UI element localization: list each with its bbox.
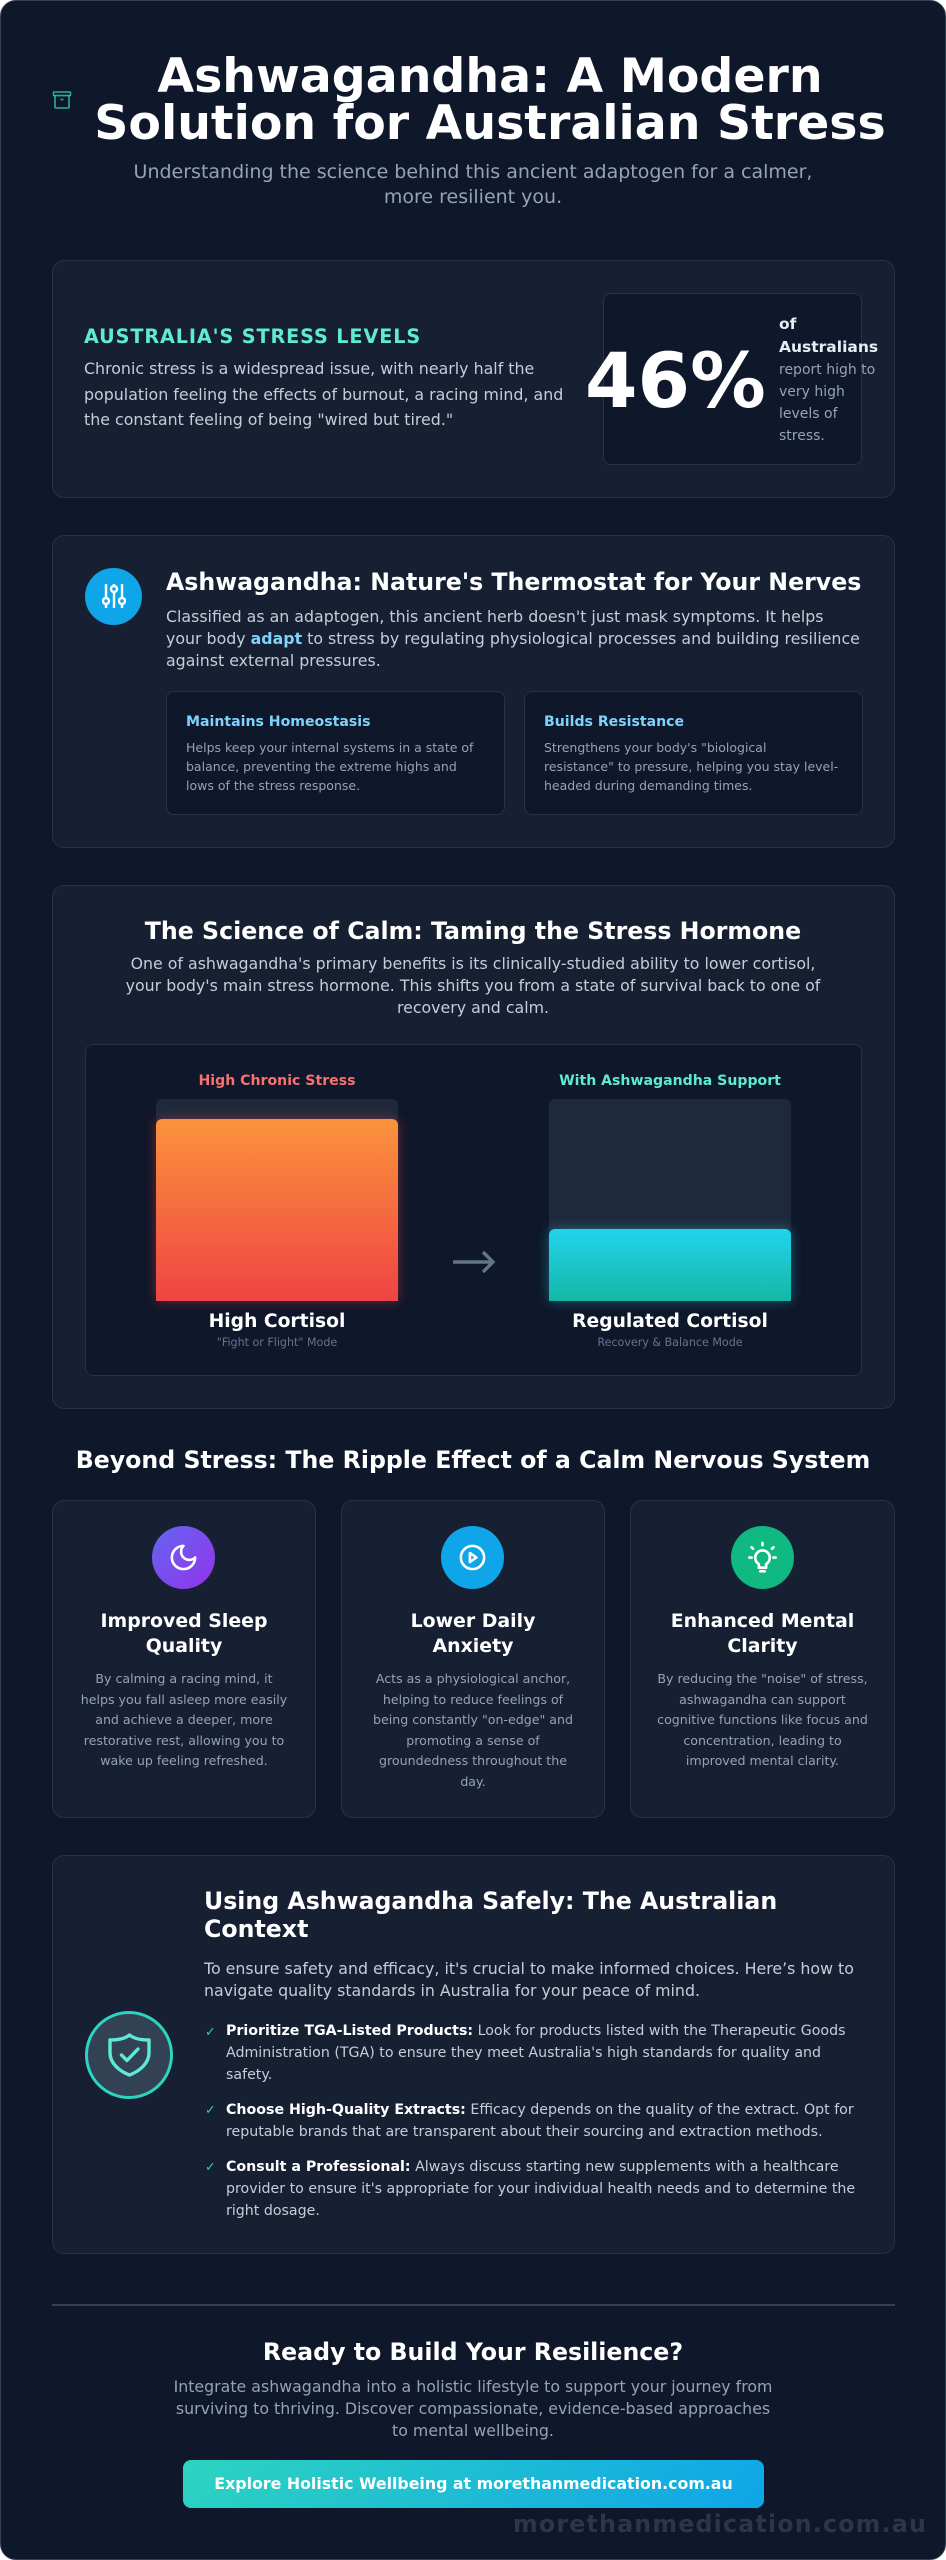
text: adaptogen: your body adapt to stress by regulating physiological processes and building resilience	[166, 629, 860, 648]
item: TGA: safety.	[226, 2067, 272, 2083]
heading: thermostat: Ashwagandha: Nature's Thermostat for Your Nerves	[166, 568, 861, 596]
text: safety intro	[204, 1959, 854, 2000]
card title: Maintains Homeostasis	[186, 714, 370, 730]
card text: Acts as a physiological anchor,	[376, 1671, 570, 1686]
heading: call to action: Ready to Build Your Resilience?	[263, 2338, 683, 2366]
text: chronic stress: population feeling the effects of burnout, a racing mind, and	[84, 385, 563, 404]
text: cortisol intro	[126, 954, 821, 1017]
card text: groundedness throughout the	[379, 1753, 567, 1768]
text: adaptogen: Classified as an adaptogen, this ancient herb doesn't just mask symptoms. It helps	[166, 607, 824, 626]
card text	[373, 1671, 573, 1788]
panel: science of calm	[52, 885, 895, 1409]
card text	[657, 1671, 868, 1768]
stat: 46%: 46%	[585, 337, 766, 425]
text: adaptogen	[166, 607, 860, 670]
subtitle: Understanding the science behind this ancient adaptogen for a calmer,	[134, 161, 812, 183]
stat caption: stress.	[779, 428, 825, 444]
heading: using safely	[204, 1887, 777, 1943]
card title: Builds Resistance	[544, 714, 684, 730]
heading: stress levels: AUSTRALIA'S STRESS LEVELS	[84, 325, 421, 348]
item: extracts	[226, 2102, 854, 2140]
card text: being constantly "on-edge" and	[373, 1712, 573, 1727]
card title: Clarity	[727, 1634, 798, 1656]
arrow	[453, 1250, 496, 1274]
text: call to action: surviving to thriving. Discover compassionate, evidence-based approaches	[176, 2399, 770, 2418]
label: regulated cortisol: Regulated Cortisol	[572, 1311, 768, 1332]
icon: moon	[152, 1526, 215, 1589]
card text: promoting a sense of	[406, 1732, 540, 1748]
item: extracts: Choose High-Quality Extracts: Efficacy depends on the quality of the extract. Opt for	[226, 2102, 854, 2118]
text: safety intro: To ensure safety and efficacy, it's crucial to make informed choices. Here’s how to	[204, 1959, 854, 1978]
watermark: morethanmedication.com.au	[513, 2510, 927, 2538]
heading: using safely: Context	[204, 1915, 308, 1943]
heading: science of calm: The Science of Calm: Taming the Stress Hormone	[145, 917, 801, 945]
bar: high cortisol	[156, 1098, 398, 1300]
icon: archive box	[52, 91, 72, 109]
stat caption	[779, 315, 878, 444]
title	[94, 49, 886, 151]
card title	[411, 1610, 536, 1656]
stat caption: of	[779, 315, 796, 333]
card: sleep	[52, 1500, 316, 1818]
text: chronic stress: Chronic stress is a widespread issue, with nearly half the	[84, 359, 534, 378]
subtitle: more resilient you.	[384, 186, 562, 208]
text: adaptogen: against external pressures.	[166, 651, 381, 670]
card text: improved mental clarity.	[686, 1753, 839, 1768]
stat caption: Australians	[779, 338, 878, 356]
card text	[544, 740, 838, 793]
card text: By reducing the "noise" of stress,	[657, 1671, 868, 1686]
label: recovery: Recovery & Balance Mode	[597, 1336, 743, 1349]
card: anxiety	[341, 1500, 605, 1818]
card text: day.	[460, 1774, 486, 1788]
item: extracts: reputable brands that are transparent about their sourcing and extraction methods.	[226, 2124, 823, 2140]
card text: wake up feeling refreshed.	[100, 1753, 268, 1768]
card title	[100, 1610, 267, 1656]
icon: light bulb	[731, 1526, 794, 1589]
card text: helping to reduce feelings of	[383, 1692, 563, 1706]
text: call to action: to mental wellbeing.	[392, 2421, 554, 2440]
item: TGA: Prioritize TGA-Listed Products: Look for products listed with the Therapeutic Goods	[226, 2023, 846, 2039]
card text: lows of the stress response.	[186, 778, 360, 793]
panel: using safely	[52, 1855, 895, 2254]
card text: restorative rest, allowing you to	[84, 1732, 284, 1748]
check: ✓	[205, 2160, 216, 2175]
item: TGA	[226, 2023, 846, 2083]
panel: Australia's stress levels	[52, 260, 895, 498]
stat box	[603, 293, 862, 465]
text: cortisol intro: recovery and calm.	[397, 998, 549, 1017]
card text: ashwagandha can support	[679, 1692, 846, 1706]
button: explore	[183, 2460, 764, 2508]
label: with support: With Ashwagandha Support	[559, 1073, 781, 1089]
panel: nature's thermostat	[52, 535, 895, 848]
card: resistance	[524, 691, 863, 815]
card title: Enhanced Mental	[671, 1610, 854, 1632]
item: professional: provider to ensure it's appropriate for your individual health needs and to determine the	[226, 2181, 855, 2197]
card text: concentration, leading to	[683, 1732, 842, 1748]
heading: using safely: Using Ashwagandha Safely: The Australian	[204, 1887, 777, 1915]
title: Ashwagandha: A Modern	[157, 49, 823, 104]
text: chronic stress	[84, 359, 563, 429]
item: professional: Consult a Professional: Always discuss starting new supplements with a healthcare	[226, 2159, 839, 2175]
stat caption: levels of	[779, 406, 838, 422]
check: ✓	[205, 2025, 216, 2040]
chart: cortisol comparison	[85, 1044, 862, 1376]
item: TGA: Administration (TGA) to ensure they meet Australia's high standards for quality and	[226, 2045, 821, 2061]
text: cortisol intro: your body's main stress hormone. This shifts you from a state of survival back to one of	[126, 976, 820, 995]
stat caption: very high	[779, 384, 845, 400]
text: chronic stress: the constant feeling of being "wired but tired."	[84, 410, 453, 429]
card text: By calming a racing mind, it	[95, 1671, 273, 1686]
icon: sliders	[85, 568, 142, 625]
label: fight or flight: "Fight or Flight" Mode	[217, 1336, 337, 1349]
card text	[186, 740, 474, 793]
check: ✓	[205, 2103, 216, 2118]
text: call to action: Integrate ashwagandha into a holistic lifestyle to support your journey from	[174, 2377, 772, 2396]
item: professional: right dosage.	[226, 2203, 320, 2219]
card text: resistance" to pressure, helping you stay level-	[544, 759, 838, 774]
text: cortisol intro: One of ashwagandha's primary benefits is its clinically-studied ability to lower cortisol,	[131, 954, 815, 973]
text: call to action	[174, 2377, 772, 2440]
subtitle	[134, 161, 812, 208]
item: professional	[226, 2159, 855, 2219]
card title: Quality	[146, 1634, 222, 1656]
card title	[671, 1610, 854, 1656]
button: explore: Explore Holistic Wellbeing at morethanmedication.com.au	[214, 2474, 733, 2493]
card text: balance, preventing the extreme highs and	[186, 759, 457, 774]
card text: headed during demanding times.	[544, 778, 752, 793]
label: high cortisol: High Cortisol	[209, 1311, 345, 1332]
text: safety intro: navigate quality standards in Australia for your peace of mind.	[204, 1981, 700, 2000]
card title: Anxiety	[433, 1634, 513, 1656]
card text: and achieve a deeper, more	[95, 1712, 273, 1727]
card title: Improved Sleep	[100, 1610, 267, 1632]
card text	[81, 1671, 287, 1768]
card title: Lower Daily	[411, 1610, 535, 1632]
bar: regulated cortisol	[549, 1098, 791, 1300]
card text: Helps keep your internal systems in a state of	[186, 740, 473, 755]
heading: ripple effect: Beyond Stress: The Ripple Effect of a Calm Nervous System	[76, 1446, 870, 1474]
stat caption: report high to	[779, 362, 875, 378]
card text: helps you fall asleep more easily	[81, 1692, 287, 1706]
card: clarity	[630, 1500, 895, 1818]
card text: cognitive functions like focus and	[657, 1712, 868, 1727]
card: homeostasis	[166, 691, 505, 815]
card text: Strengthens your body's "biological	[544, 740, 766, 755]
title: Solution for Australian Stress	[94, 96, 886, 151]
icon: play circle	[441, 1526, 504, 1589]
label: high stress: High Chronic Stress	[199, 1073, 355, 1089]
icon: shield	[85, 2011, 173, 2099]
